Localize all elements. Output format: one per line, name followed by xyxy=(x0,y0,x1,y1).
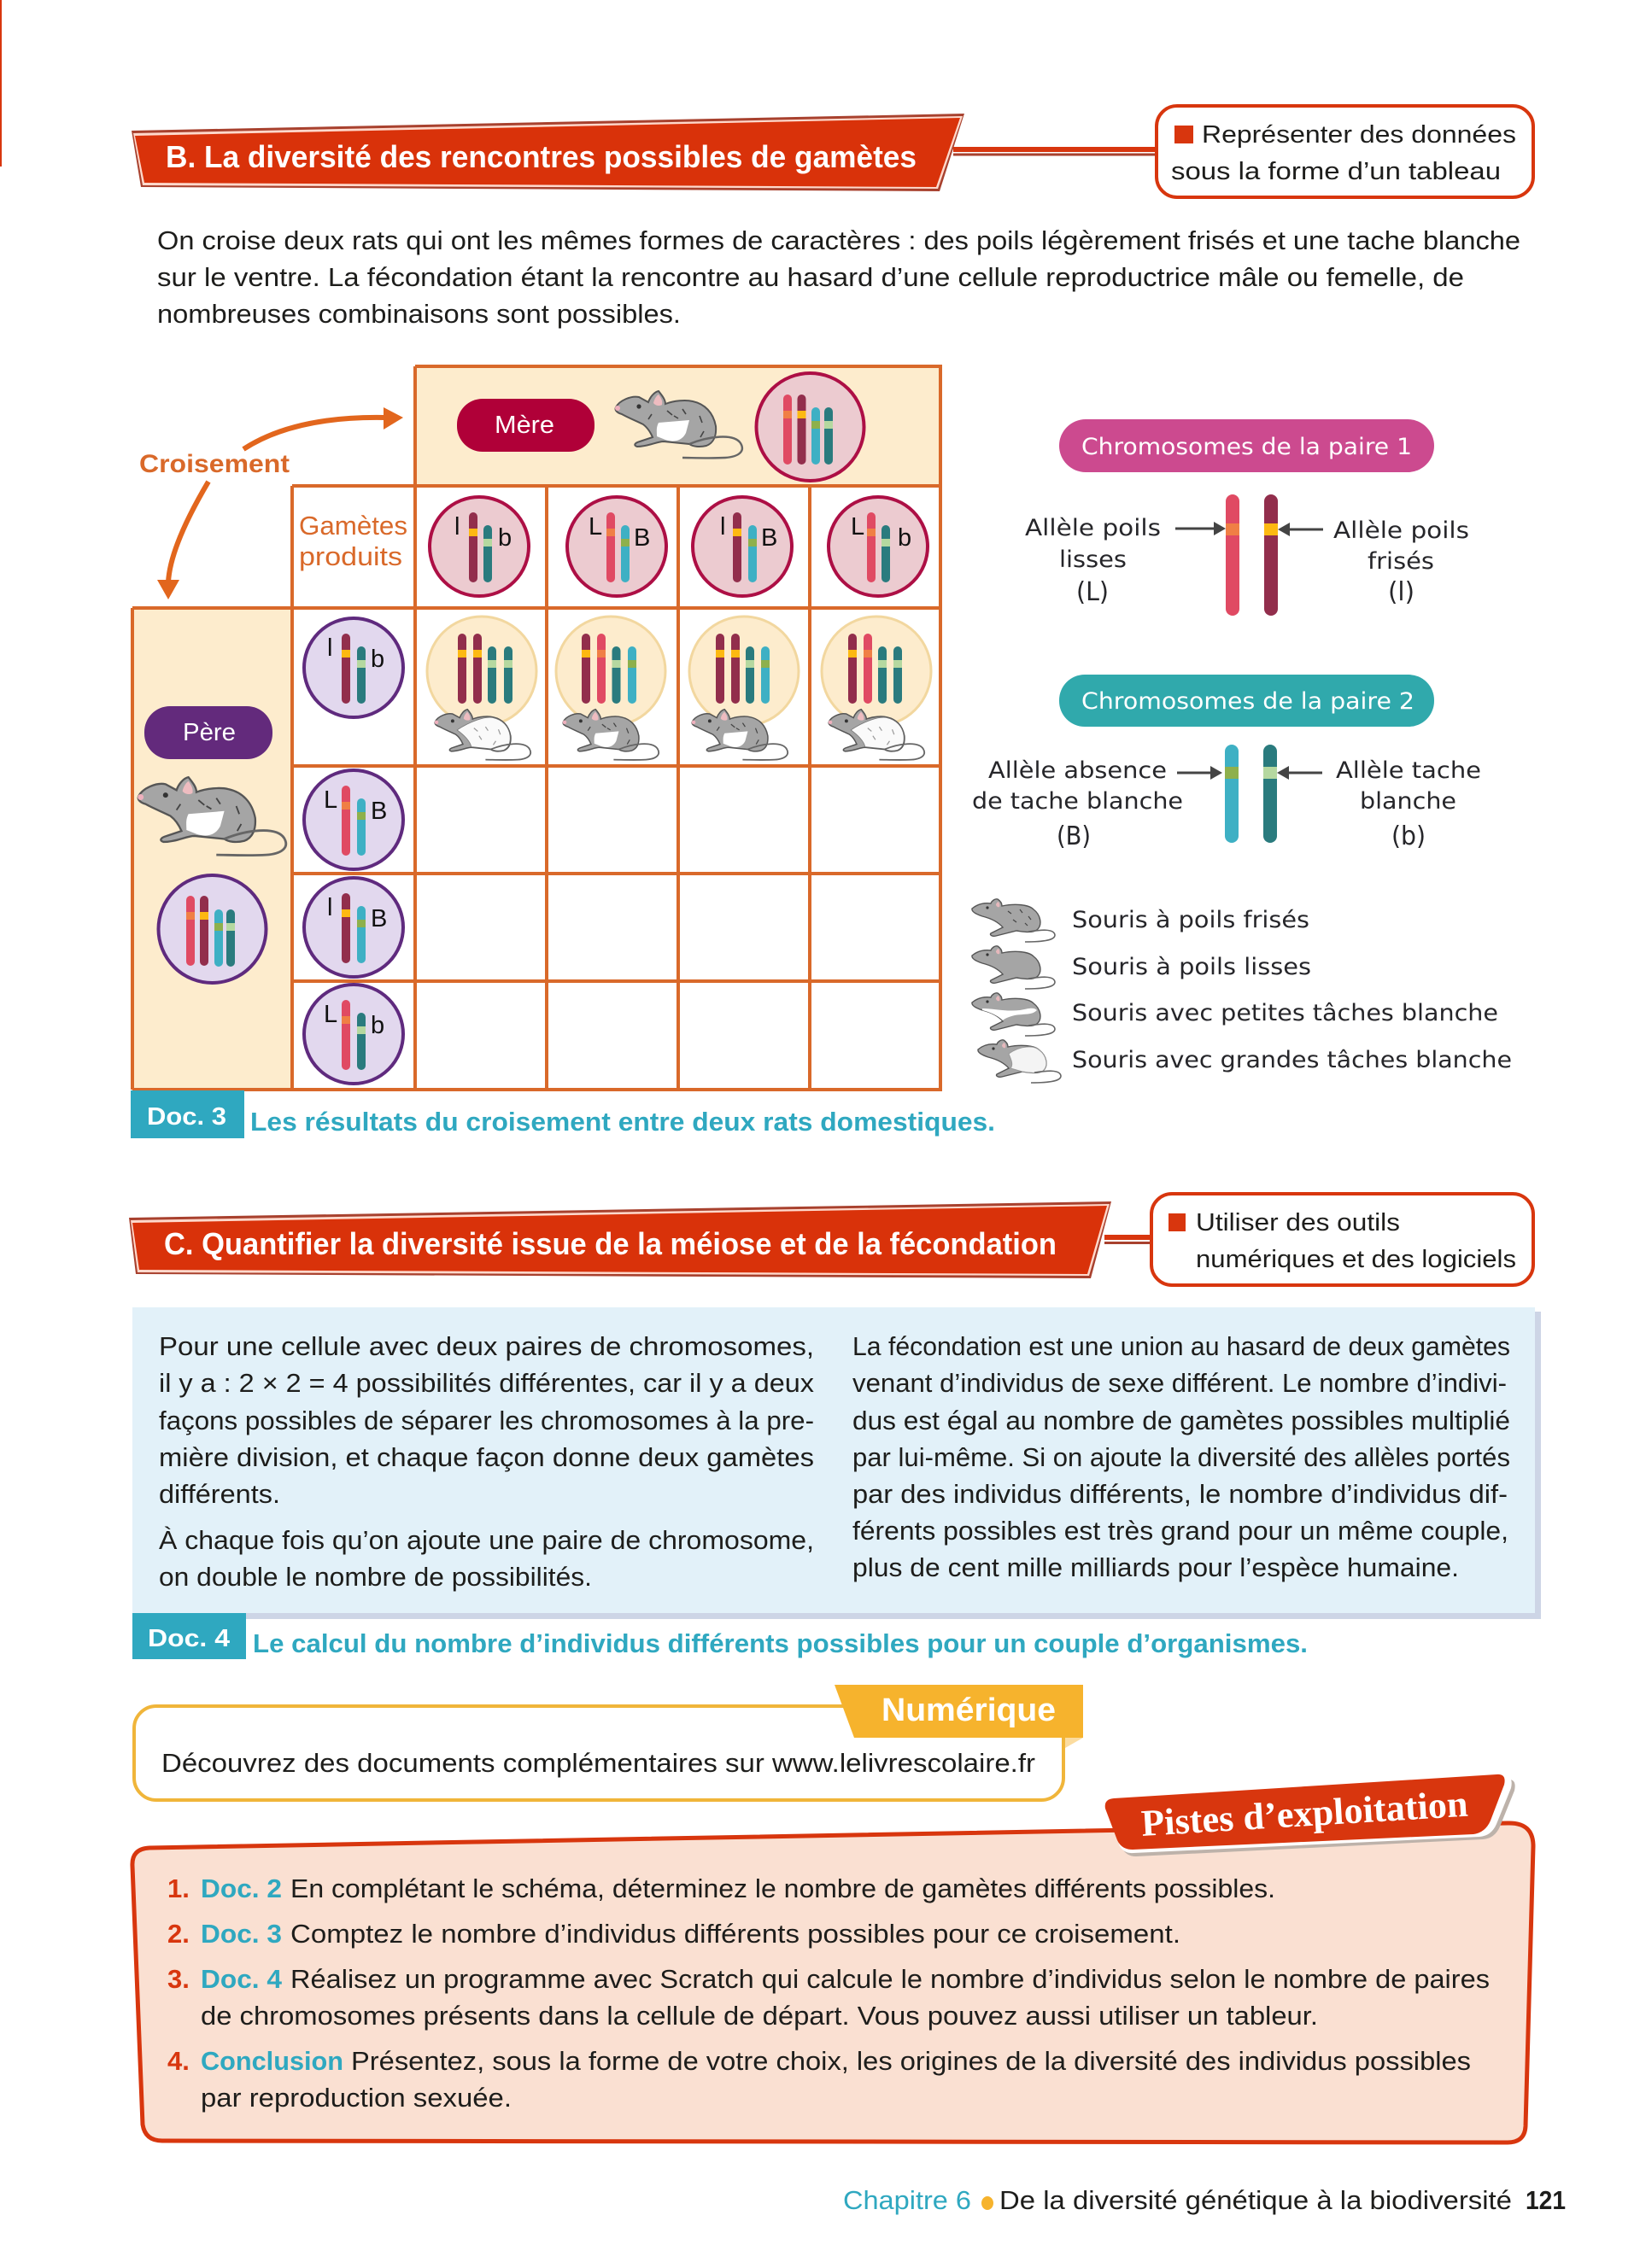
mother pill xyxy=(457,399,594,452)
tag white edge xyxy=(1110,1777,1512,1853)
allele b label: Allèle tache xyxy=(1336,757,1481,784)
doc 3 caption: Doc. 3 xyxy=(147,1103,226,1131)
mother gamete l B: l xyxy=(720,513,725,541)
father gamete l B: l xyxy=(327,894,332,921)
gametes produced label: produits xyxy=(299,541,402,571)
doc 4 caption xyxy=(132,1613,1308,1659)
numerique tab xyxy=(835,1685,1083,1738)
question 2: Comptez le nombre d’individus différents possibles pour ce croisement. xyxy=(290,1919,1180,1949)
question 3: de chromosomes présents dans la cellule de départ. Vous pouvez aussi utiliser un tableur. xyxy=(201,2001,1318,2031)
mother rat xyxy=(615,391,742,458)
father gamete L B: B xyxy=(371,798,387,825)
mother gamete l b: l xyxy=(454,513,460,541)
heading C: C. Quantifier la diversité issue de la méiose et de la fécondation xyxy=(164,1226,1057,1261)
father gamete l B: B xyxy=(371,905,387,932)
question 3 xyxy=(167,1964,1490,2031)
pair 1 pill: Chromosomes de la paire 1 xyxy=(1081,434,1412,460)
left column text: mière division, et chaque façon donne deux gamètes xyxy=(159,1442,814,1472)
numerique tab fold xyxy=(1065,1738,1083,1748)
arrow right allele l xyxy=(1278,523,1323,536)
right column text: venant d’individus de sexe différent. Le nombre d’indivi- xyxy=(852,1368,1507,1398)
offspring 4 xyxy=(822,617,931,760)
panel shadow xyxy=(138,1312,1541,1619)
question 1: 1. xyxy=(167,1873,190,1903)
question 4: Conclusion xyxy=(201,2046,343,2076)
legend smooth text: Souris à poils lisses xyxy=(1072,954,1311,980)
mother header panel xyxy=(415,366,940,486)
intro text: nombreuses combinaisons sont possibles. xyxy=(157,299,681,329)
father gamete L b xyxy=(304,985,403,1084)
footer: Chapitre 6 xyxy=(843,2185,971,2215)
tag shadow xyxy=(1115,1780,1515,1856)
footer: De la diversité génétique à la biodiversité xyxy=(999,2185,1512,2215)
question 4: par reproduction sexuée. xyxy=(201,2083,512,2113)
panel: doc 4 text xyxy=(132,1307,1541,1619)
allele B label xyxy=(972,757,1183,851)
father gamete L B: L xyxy=(324,786,337,814)
father pill xyxy=(144,706,272,759)
right column text: La fécondation est une union au hasard de deux gamètes xyxy=(852,1331,1510,1361)
allele b label xyxy=(1336,757,1481,851)
right column text xyxy=(852,1331,1510,1582)
allele L label: Allèle poils xyxy=(1025,515,1161,541)
right column text: plus de cent mille milliards pour l’espèce humaine. xyxy=(852,1552,1459,1582)
mother gamete L b xyxy=(829,497,928,596)
mother gamete L b: L xyxy=(851,513,864,541)
question 2: Doc. 3 xyxy=(201,1919,282,1949)
right column text: par lui-même. Si on ajoute la diversité des allèles portés xyxy=(852,1442,1510,1472)
skill box B xyxy=(1157,106,1533,197)
legend curly text: Souris à poils frisés xyxy=(1072,907,1309,933)
question 4 xyxy=(167,2046,1471,2113)
father gamete l B xyxy=(304,878,403,977)
question 4: 4. xyxy=(167,2046,190,2076)
panel background xyxy=(132,1307,1535,1613)
right column text: par des individus différents, le nombre d’individus dif- xyxy=(852,1479,1508,1509)
left column text: À chaque fois qu’on ajoute une paire de chromosome, xyxy=(159,1525,814,1555)
question 3: 3. xyxy=(167,1964,190,1994)
arrow left allele B xyxy=(1177,766,1222,780)
question 1: Doc. 2 xyxy=(201,1873,282,1903)
pair 2 pill xyxy=(1059,675,1434,727)
page edge mark xyxy=(0,0,2,167)
skill box C xyxy=(1151,1194,1533,1285)
father gamete L b: L xyxy=(324,1001,337,1028)
father gamete L b: b xyxy=(371,1012,384,1039)
doc 4 caption: Doc. 4 xyxy=(148,1625,230,1652)
right column text: dus est égal au nombre de gamètes possibles multiplié xyxy=(852,1406,1510,1435)
allele L label: (L) xyxy=(1076,577,1109,607)
gametes produced label: Gamètes xyxy=(299,511,407,541)
skill box C: numériques et des logiciels xyxy=(1196,1246,1516,1273)
banner B xyxy=(132,114,964,191)
allele l label: Allèle poils xyxy=(1333,517,1469,544)
banner C xyxy=(129,1201,1111,1278)
numerique outline xyxy=(134,1706,1063,1800)
allele L label xyxy=(1025,515,1161,607)
allele l label: frisés xyxy=(1368,548,1434,575)
crossing label: Croisement xyxy=(139,450,290,478)
left column text: façons possibles de séparer les chromosomes à la pre- xyxy=(159,1406,814,1435)
heading B: B. La diversité des rencontres possibles de gamètes xyxy=(166,139,917,174)
left column text: il y a : 2 × 2 = 4 possibilités différentes, car il y a deux xyxy=(159,1368,815,1398)
gametes produced label xyxy=(299,511,407,571)
mother gamete l B xyxy=(693,497,792,596)
doc 4 caption: Le calcul du nombre d’individus différents possibles pour un couple d’organismes. xyxy=(253,1628,1308,1658)
allele b label: blanche xyxy=(1360,788,1456,815)
footer xyxy=(843,2185,1566,2215)
pair 2 chromosomes xyxy=(1225,745,1277,843)
question 3: Doc. 4 xyxy=(201,1964,283,1994)
allele b label: (b) xyxy=(1391,821,1426,851)
right column text: férents possibles est très grand pour un même couple, xyxy=(852,1516,1508,1546)
mother gamete l b xyxy=(430,497,529,596)
cross table xyxy=(132,366,942,1090)
father cell xyxy=(159,875,266,983)
numerique text: Découvrez des documents complémentaires sur www.lelivrescolaire.fr xyxy=(161,1748,1035,1778)
mother gamete L B: L xyxy=(589,513,602,541)
mother gamete l b: b xyxy=(498,524,512,552)
father side panel xyxy=(132,608,292,1090)
allele B label: de tache blanche xyxy=(972,788,1183,815)
panel: pistes d'exploitation xyxy=(132,1774,1533,2142)
numerique title: Numérique xyxy=(882,1692,1056,1728)
mother gamete L B: B xyxy=(634,524,650,552)
question 4: Présentez, sous la forme de votre choix, les origines de la diversité des individus possibles xyxy=(351,2046,1471,2076)
legend large spots text: Souris avec grandes tâches blanche xyxy=(1072,1047,1512,1073)
pair 1 chromosomes xyxy=(1226,494,1278,616)
skill box C: Utiliser des outils xyxy=(1196,1209,1400,1236)
mother cell xyxy=(757,373,864,481)
allele B label: (B) xyxy=(1057,821,1091,851)
question 2: 2. xyxy=(167,1919,190,1949)
left column text xyxy=(159,1331,815,1592)
section B header xyxy=(132,106,1533,197)
arrow left allele L xyxy=(1175,522,1226,535)
footer: 121 xyxy=(1526,2185,1566,2215)
question 3: Réalisez un programme avec Scratch qui calcule le nombre d’individus selon le nombre de paires xyxy=(290,1964,1490,1994)
arrow right allele b xyxy=(1277,766,1322,780)
connector B xyxy=(953,147,1157,155)
connector C xyxy=(1104,1235,1151,1244)
left column text: différents. xyxy=(159,1479,280,1509)
left column text: on double le nombre de possibilités. xyxy=(159,1562,592,1592)
mother pill: Mère xyxy=(495,412,554,439)
legend large spots rat xyxy=(978,1040,1061,1083)
left column text: Pour une cellule avec deux paires de chromosomes, xyxy=(159,1331,814,1361)
tag title: Pistes d’exploitation xyxy=(1140,1783,1469,1844)
father gamete l b: b xyxy=(371,646,384,673)
arrow to father xyxy=(157,482,208,599)
pair 1 pill xyxy=(1059,419,1434,472)
intro text: On croise deux rats qui ont les mêmes formes de caractères : des poils légèrement frisés et une tache blanche xyxy=(157,225,1520,255)
chromosome pair 2 key xyxy=(972,675,1481,851)
skill box B: sous la forme d’un tableau xyxy=(1171,158,1501,185)
father pill: Père xyxy=(183,719,236,746)
doc 3 caption xyxy=(131,1090,995,1138)
chromosome pair 1 key xyxy=(1025,419,1469,616)
father rat xyxy=(138,777,286,856)
doc 3 caption: Les résultats du croisement entre deux rats domestiques. xyxy=(250,1107,995,1137)
father gamete L B xyxy=(304,770,403,869)
arrow to mother xyxy=(243,407,403,449)
legend small spots text: Souris avec petites tâches blanche xyxy=(1072,1000,1498,1026)
numerique box xyxy=(134,1685,1083,1800)
legend of rats xyxy=(972,899,1512,1083)
allele l label: (l) xyxy=(1388,577,1414,607)
mother gamete l B: B xyxy=(761,524,777,552)
legend curly rat xyxy=(972,899,1055,942)
father gamete l b xyxy=(304,618,403,717)
offspring 3 xyxy=(689,617,799,760)
intro text xyxy=(157,225,1520,329)
allele B label: Allèle absence xyxy=(988,757,1167,784)
tag xyxy=(1105,1774,1505,1850)
offspring 1 xyxy=(427,617,536,760)
mother gamete L b: b xyxy=(898,524,911,552)
allele L label: lisses xyxy=(1059,547,1127,573)
question 1: En complétant le schéma, déterminez le nombre de gamètes différents possibles. xyxy=(290,1873,1275,1903)
legend smooth rat xyxy=(972,946,1055,989)
intro text: sur le ventre. La fécondation étant la rencontre au hasard d’une cellule reproductrice mâle ou femelle, de xyxy=(157,262,1464,292)
panel background xyxy=(132,1823,1533,2142)
offspring 2 xyxy=(556,617,665,760)
allele l label xyxy=(1333,517,1469,607)
mother gamete L B xyxy=(567,497,666,596)
pair 2 pill: Chromosomes de la paire 2 xyxy=(1081,688,1414,715)
legend small spots rat xyxy=(972,993,1055,1036)
section C header xyxy=(129,1194,1533,1285)
skill box B: Représenter des données xyxy=(1202,121,1516,149)
father gamete l b: l xyxy=(327,634,332,662)
